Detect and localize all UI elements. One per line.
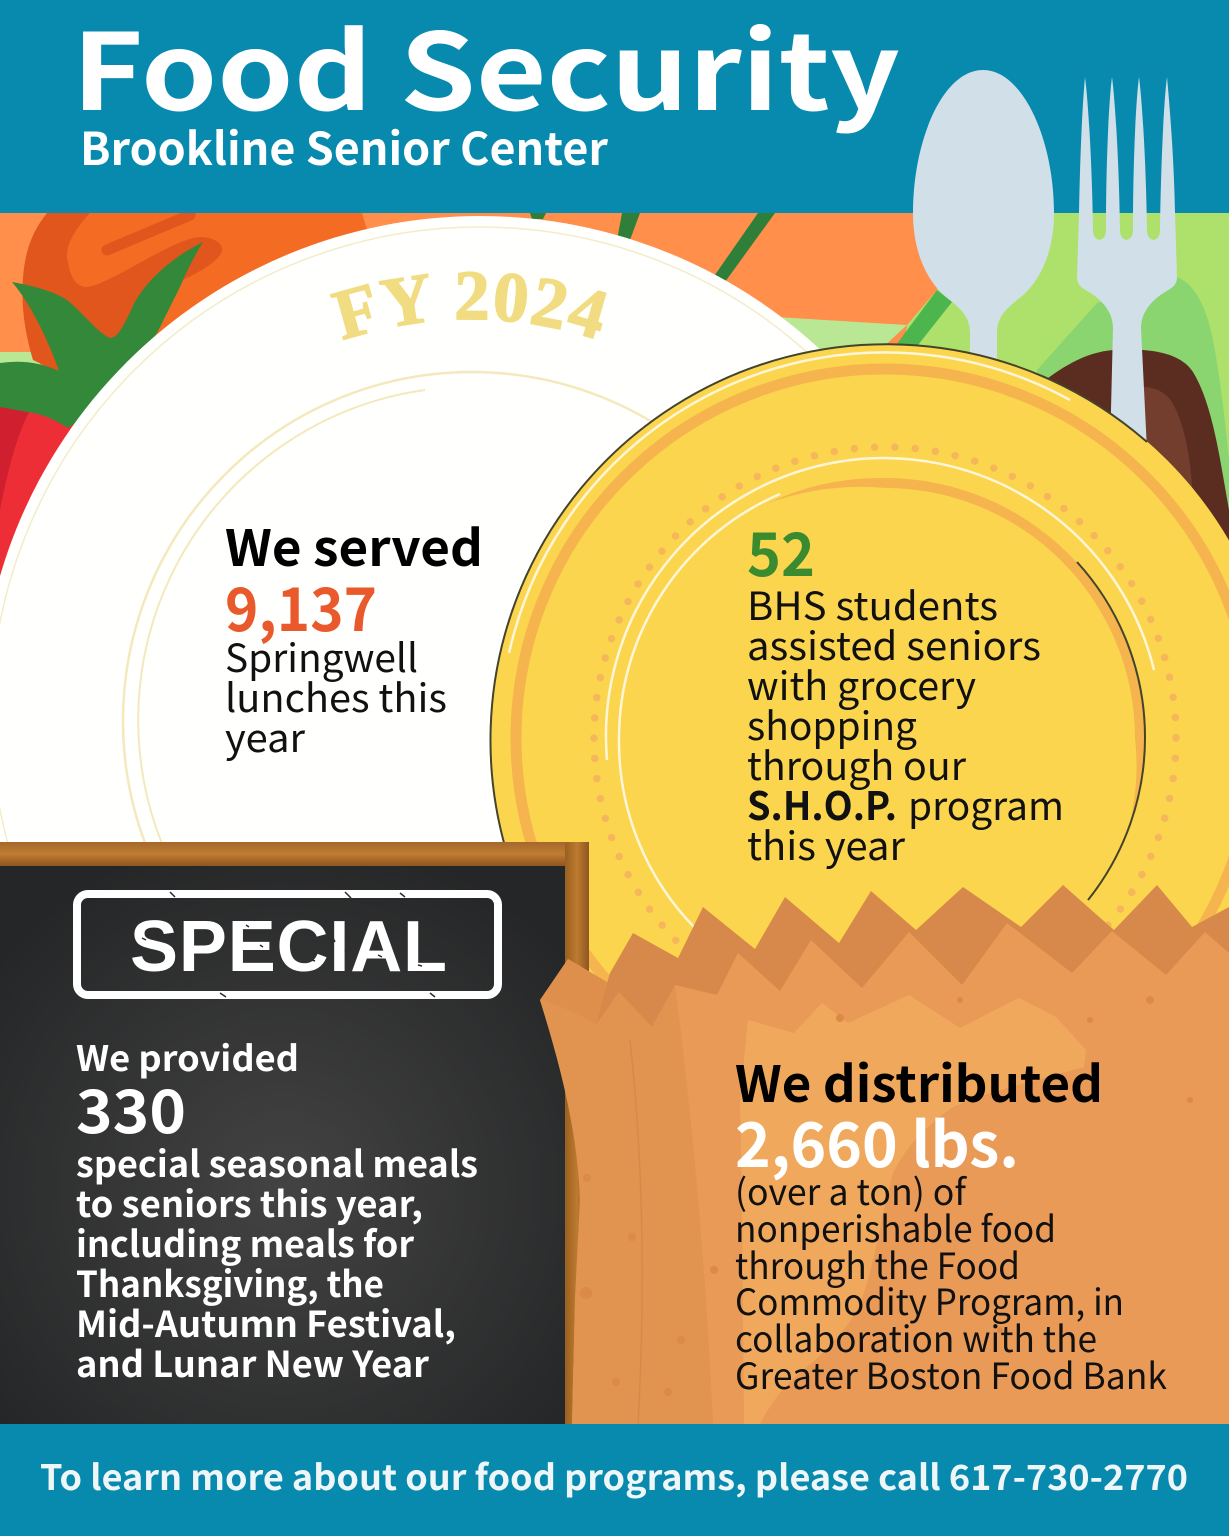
panel: white plate [0,216,820,842]
label: SPECIAL stamp [77,892,498,997]
text block: seasonal meals [76,1031,478,1388]
text block: seasonal meals: We provided [76,1031,299,1082]
text block: lunches served: year [225,708,306,764]
panel: chalkboard [0,842,589,1424]
icon: fork [1077,77,1177,450]
wooden frame [0,842,589,1424]
text block: BHS students: assisted seniors [747,616,1041,672]
text block: seasonal meals: Thanksgiving, the [76,1256,384,1308]
text block: distributed food: (over a ton) of [735,1164,967,1216]
footer text: To learn more about our food programs, please call 617-730-2770 [40,1450,1188,1501]
title [72,0,900,178]
text block: lunches served: 9,137 [225,562,377,649]
text block: seasonal meals: and Lunar New Year [76,1336,429,1388]
header band [0,0,1229,213]
text block: BHS students: with grocery [747,656,976,712]
text block: distributed food: nonperishable food [735,1201,1056,1253]
text block: BHS students: through our [747,736,967,792]
text block: BHS students: 52 [747,507,815,594]
text block: seasonal meals: special seasonal meals [76,1136,478,1188]
text block: BHS students: shopping [747,696,917,752]
text block: lunches served [225,509,483,764]
text block: seasonal meals: Mid-Autumn Festival, [76,1296,456,1348]
text block: lunches served: Springwell [225,628,418,684]
illustration: stems [530,213,952,345]
footer band [0,1424,1229,1536]
text block: distributed food: Greater Boston Food Bank [735,1348,1167,1400]
icon: spoon [913,70,1054,400]
panel: yellow plate [490,344,1229,1136]
text block: BHS students: this year [747,816,906,872]
illustration: tomato [0,213,370,600]
text block: distributed food: collaboration with the [735,1311,1097,1363]
text block: BHS students [747,507,1064,872]
label: SPECIAL stamp: SPECIAL [130,907,447,987]
text block: BHS students: S.H.O.P. [747,776,897,832]
text block: distributed food: We distributed [735,1045,1103,1117]
text block: seasonal meals: to seniors this year, [76,1176,423,1228]
text block: lunches served: lunches this [225,668,447,724]
text block: seasonal meals: 330 [76,1064,186,1151]
tablecloth background [0,213,1229,560]
text block: distributed food [735,1045,1167,1400]
text block: BHS students: BHS students [747,576,998,632]
text block: distributed food: Commodity Program, in [735,1274,1124,1326]
text block: distributed food: 2,660 lbs. [735,1095,1019,1185]
icon: tomato leaf [0,242,203,428]
text block: distributed food: through the Food [735,1238,1020,1290]
text block: BHS students: program [908,776,1064,832]
text block: seasonal meals: including meals for [76,1216,414,1268]
text block: lunches served: We served [225,509,483,581]
heading: FY 2024: FY 2024 [330,271,607,340]
panel: paper bag [540,885,1229,1424]
illustration: green vegetable and brown food [1037,277,1229,560]
subtitle: Brookline Senior Center [80,113,608,178]
